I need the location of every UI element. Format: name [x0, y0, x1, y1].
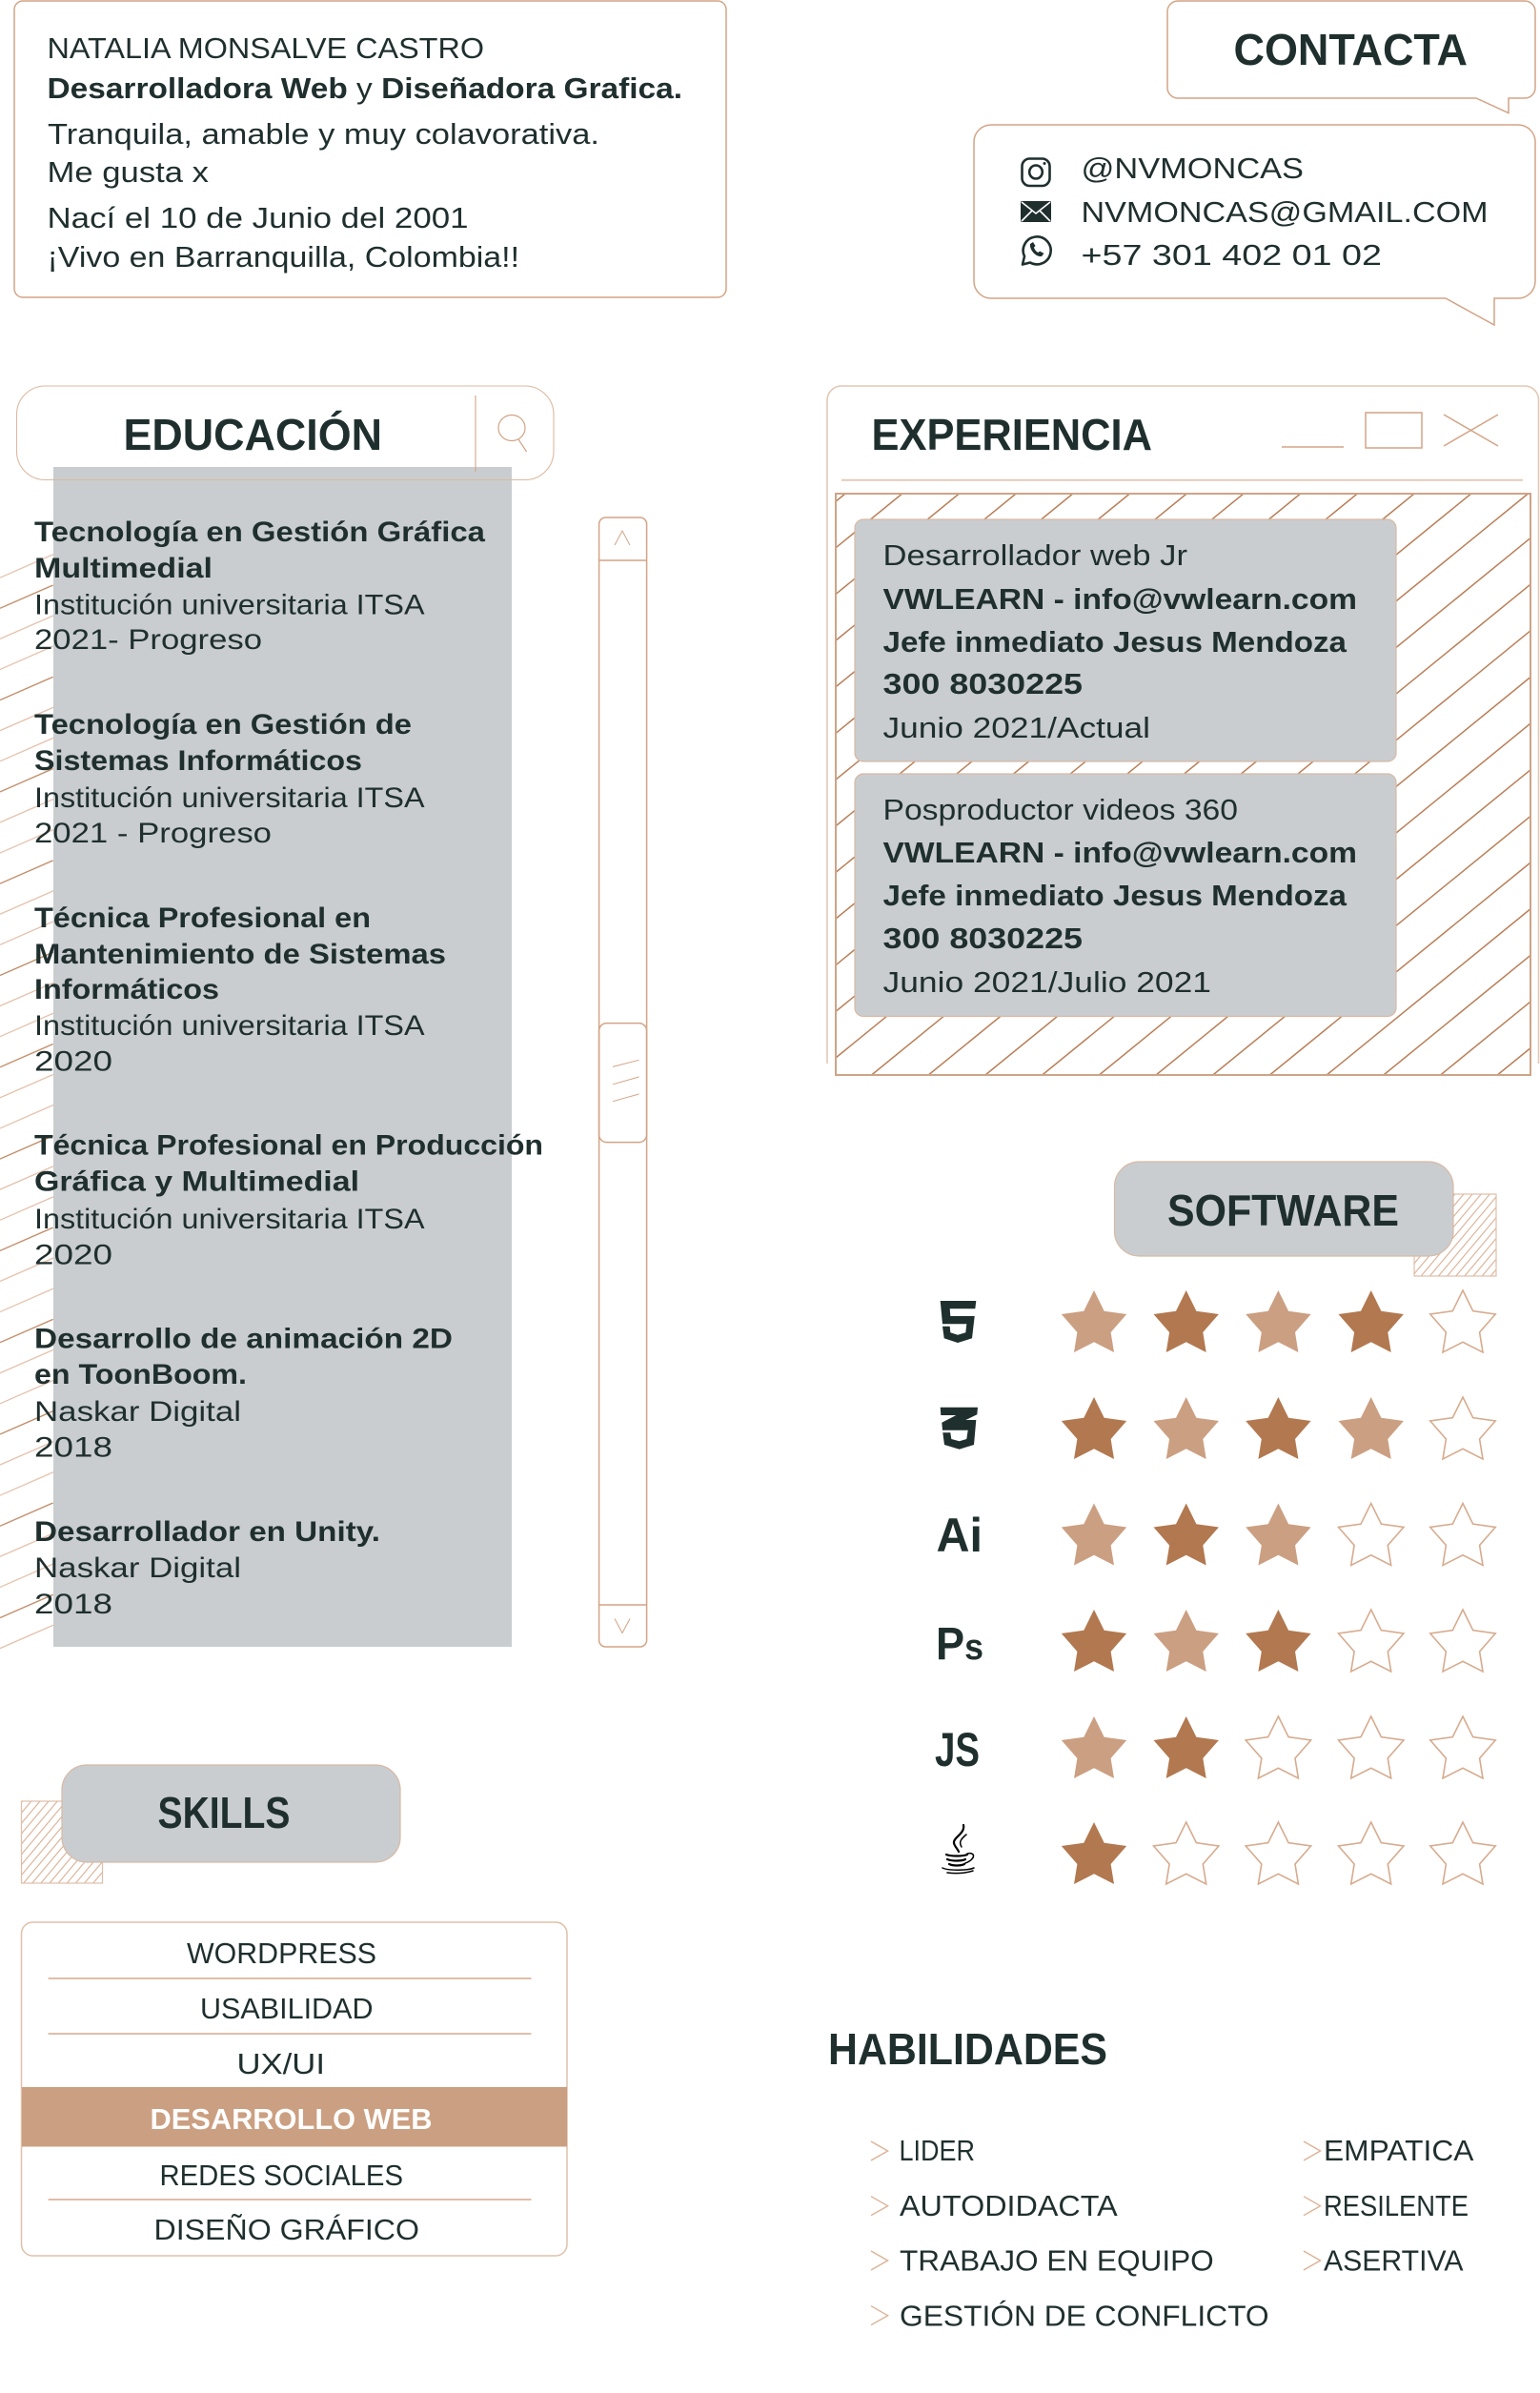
education item 6: Desarrollador en Unity. — [34, 1516, 380, 1548]
list: habilidades column 2 — [1304, 2134, 1474, 2278]
heading: software: SOFTWARE — [1167, 1186, 1399, 1235]
panel: experiencia window — [826, 385, 1540, 1076]
software row: illustrator — [936, 1504, 1495, 1565]
icon: java — [942, 1825, 974, 1874]
education item 3: Mantenimiento de Sistemas — [34, 939, 446, 970]
bio: Tranquila, amable y muy colavorativa. — [48, 117, 599, 151]
text: instagram handle: @NVMONCAS — [1081, 152, 1304, 185]
card: job 1: VWLEARN - info@vwlearn.com — [882, 582, 1357, 616]
heading: software — [1115, 1162, 1496, 1276]
software row: html5 — [941, 1290, 1495, 1352]
heading: contacta — [1167, 1, 1535, 113]
panel: contact details — [974, 125, 1535, 325]
panel: about — [14, 1, 726, 297]
list: habilidades column 1 — [871, 2134, 1269, 2333]
card: job 2: VWLEARN - info@vwlearn.com — [882, 836, 1357, 869]
skill: diseno grafico: DISEÑO GRÁFICO — [154, 2213, 419, 2246]
skill: desarrollo web highlighted — [22, 2087, 567, 2146]
software row: illustrator: Ai — [936, 1509, 983, 1562]
text: phone: +57 301 402 01 02 — [1081, 238, 1382, 272]
list: habilidades column 1: LIDER — [900, 2134, 975, 2167]
list: habilidades column 1: AUTODIDACTA — [900, 2189, 1118, 2222]
bio: ¡Vivo en Barranquilla, Colombia!! — [48, 240, 519, 274]
bio — [48, 117, 599, 274]
icon: instagram — [1022, 158, 1050, 186]
education item 3 — [34, 902, 446, 1078]
education item 4: Institución universitaria ITSA — [34, 1204, 424, 1235]
icon: css3 — [941, 1408, 978, 1450]
skill: wordpress: WORDPRESS — [187, 1937, 376, 1970]
software row: photoshop — [936, 1610, 1495, 1672]
education item 4: Técnica Profesional en Producción — [34, 1130, 543, 1161]
card: job 1 — [855, 519, 1396, 761]
card: job 2: Jefe inmediato Jesus Mendoza — [882, 879, 1348, 912]
icon: html5 — [941, 1301, 976, 1343]
education item 2 — [34, 709, 424, 849]
heading: skills — [21, 1765, 400, 1883]
card: job 2 — [855, 774, 1396, 1016]
education item 5 — [34, 1323, 453, 1464]
education item 3: Institución universitaria ITSA — [34, 1010, 424, 1042]
list: habilidades column 2: RESILENTE — [1324, 2189, 1469, 2222]
education item 1 — [34, 517, 485, 656]
skill: ux/ui: UX/UI — [236, 2047, 325, 2080]
education item 1: Tecnología en Gestión Gráfica — [34, 517, 485, 548]
education item 5: en ToonBoom. — [34, 1359, 247, 1390]
bio: Me gusta x — [48, 155, 210, 189]
education item 1: Multimedial — [34, 553, 213, 584]
software row: photoshop: Ps — [936, 1619, 983, 1670]
card: job 1: Jefe inmediato Jesus Mendoza — [882, 625, 1348, 659]
education item 2: 2021 - Progreso — [34, 818, 272, 849]
window controls — [1282, 413, 1498, 448]
heading: educacion: EDUCACIÓN — [124, 410, 382, 459]
education item 3: Informáticos — [34, 974, 219, 1005]
panel: educacion background — [0, 467, 512, 1649]
text: email: NVMONCAS@GMAIL.COM — [1081, 195, 1489, 229]
software row: java — [942, 1822, 1495, 1884]
scrollbar — [599, 517, 647, 1647]
education item 1: 2021- Progreso — [34, 624, 262, 656]
icon: mail — [1021, 201, 1051, 222]
card: job 1: 300 8030225 — [882, 667, 1083, 700]
education item 5: Desarrollo de animación 2D — [34, 1323, 453, 1355]
education item 3: Técnica Profesional en — [34, 902, 371, 934]
skill: usabilidad: USABILIDAD — [200, 1992, 374, 2025]
education item 2: Institución universitaria ITSA — [34, 782, 424, 814]
list: habilidades column 1: GESTIÓN DE CONFLICTO — [900, 2300, 1269, 2333]
software row: javascript — [935, 1716, 1495, 1778]
card: job 2: Posproductor videos 360 — [882, 793, 1238, 826]
education item 5: 2018 — [34, 1431, 112, 1464]
education item 6: Naskar Digital — [34, 1552, 241, 1584]
heading: skills: SKILLS — [158, 1788, 290, 1837]
role: Desarrolladora Web y Diseñadora Grafica. — [48, 71, 682, 105]
icon: whatsapp — [1023, 236, 1051, 265]
software row: css3 — [941, 1397, 1495, 1459]
list: habilidades column 2: ASERTIVA — [1324, 2244, 1464, 2278]
name: NATALIA MONSALVE CASTRO — [48, 31, 484, 65]
education item 1: Institución universitaria ITSA — [34, 589, 424, 621]
striped background — [835, 493, 1531, 1076]
education item 4: Gráfica y Multimedial — [34, 1166, 359, 1197]
education item 4 — [34, 1130, 543, 1271]
education item 5: Naskar Digital — [34, 1396, 241, 1428]
panel: skills list — [21, 1922, 567, 2256]
education item 2: Sistemas Informáticos — [34, 745, 362, 777]
education item 6: 2018 — [34, 1589, 112, 1620]
list: habilidades column 2: EMPATICA — [1324, 2134, 1474, 2167]
card: job 1: Desarrollador web Jr — [882, 538, 1187, 572]
education item 6 — [34, 1516, 380, 1620]
bio: Nací el 10 de Junio del 2001 — [48, 201, 469, 234]
heading: experiencia: EXPERIENCIA — [871, 410, 1152, 459]
skill: redes sociales: REDES SOCIALES — [160, 2159, 403, 2192]
icon: search — [498, 416, 527, 452]
heading: educacion — [17, 386, 554, 480]
heading: habilidades: HABILIDADES — [828, 2024, 1107, 2074]
card: job 1: Junio 2021/Actual — [882, 711, 1150, 744]
heading: contacta: CONTACTA — [1233, 25, 1468, 74]
education item 2: Tecnología en Gestión de — [34, 709, 412, 740]
skill: desarrollo web highlighted: DESARROLLO WEB — [151, 2102, 433, 2136]
card: job 2: Junio 2021/Julio 2021 — [882, 965, 1211, 999]
education item 4: 2020 — [34, 1240, 112, 1271]
card: job 2: 300 8030225 — [882, 922, 1083, 955]
education item 3: 2020 — [34, 1046, 112, 1078]
software row: javascript: JS — [935, 1723, 980, 1776]
list: habilidades column 1: TRABAJO EN EQUIPO — [900, 2244, 1214, 2278]
